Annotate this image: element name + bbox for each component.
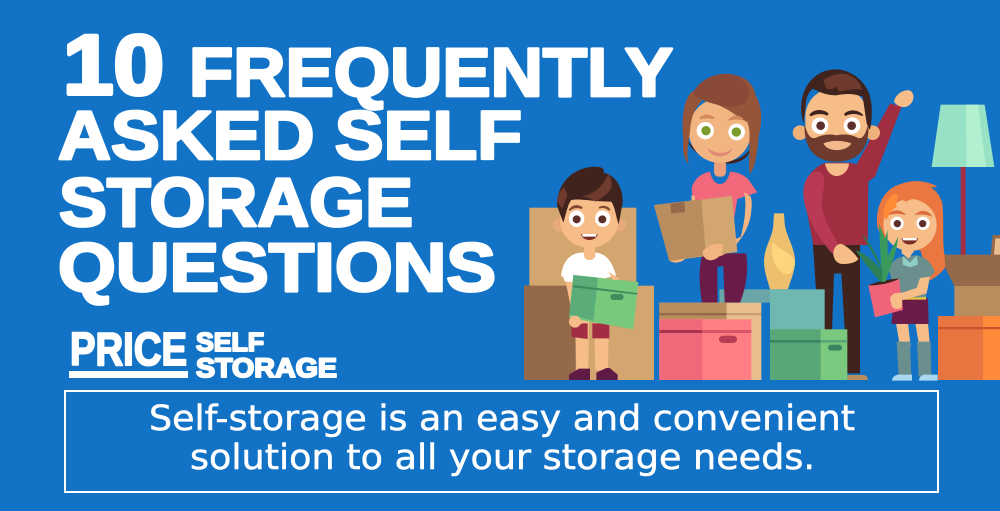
title: QUESTIONS <box>58 229 496 306</box>
logo: Price Self Storage <box>69 323 337 383</box>
mother <box>654 74 761 303</box>
green box <box>770 329 847 380</box>
title: STORAGE <box>59 164 413 241</box>
open cardboard box <box>938 255 1000 317</box>
logo: Price Self Storage: SELF <box>196 327 264 357</box>
callout box <box>65 391 938 492</box>
vase <box>764 213 795 289</box>
title: ASKED SELF <box>58 97 522 174</box>
father <box>793 69 913 380</box>
pink box stack <box>659 303 761 380</box>
title: FREQUENTLY <box>189 34 673 111</box>
lamp <box>932 105 994 255</box>
title <box>58 18 673 306</box>
orange box <box>938 316 1000 380</box>
illustration: right group <box>764 69 1000 381</box>
callout box: solution to all your storage needs. <box>190 438 815 478</box>
stacked cardboard boxes behind boy <box>524 208 654 380</box>
callout box: Self-storage is an easy and convenient <box>149 399 855 439</box>
logo: Price Self Storage: PRICE <box>70 323 187 375</box>
back teal box <box>719 289 770 303</box>
teal box <box>770 289 825 333</box>
logo: Price Self Storage: STORAGE <box>196 353 337 383</box>
title: 10 <box>63 18 164 112</box>
mother hair <box>683 74 761 174</box>
picture frame <box>991 235 1000 255</box>
illustration: left group <box>524 74 770 380</box>
girl <box>856 181 945 381</box>
boy <box>553 167 638 380</box>
